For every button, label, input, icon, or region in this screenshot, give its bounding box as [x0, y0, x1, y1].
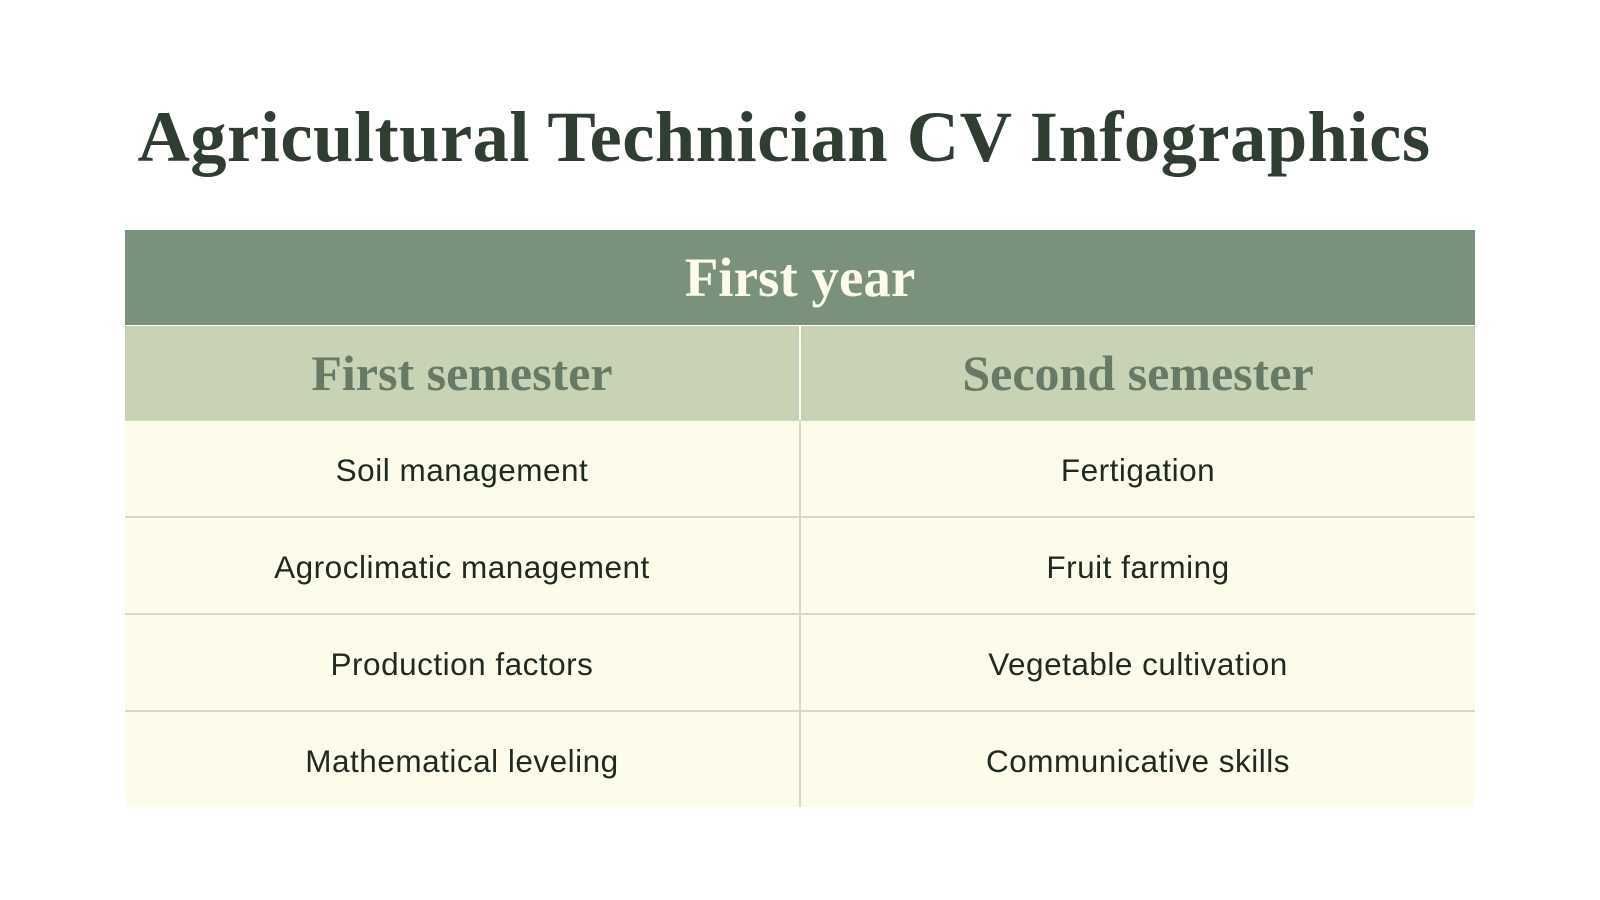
subheader: first semester	[125, 326, 799, 420]
title: Agricultural Technician CV Infographics	[137, 96, 1431, 177]
header: First year	[125, 230, 1475, 325]
row 3 right	[801, 615, 1475, 710]
row 2 left: Agroclimatic management	[274, 548, 650, 584]
subheader: second semester: Second semester	[962, 345, 1314, 401]
row 1 left: Soil management	[336, 452, 588, 488]
row 3 left: Production factors	[331, 646, 593, 682]
table	[125, 230, 1475, 807]
row 2 left	[125, 518, 799, 613]
row 3 right: Vegetable cultivation	[988, 646, 1288, 682]
row 2 right: Fruit farming	[1046, 548, 1230, 584]
row 4 left: Mathematical leveling	[305, 742, 619, 778]
row 2 right	[801, 518, 1475, 613]
row 4 right	[801, 712, 1475, 807]
row 1 right	[801, 421, 1475, 516]
subheader: second semester	[801, 326, 1475, 420]
subheader: first semester: First semester	[311, 345, 613, 401]
row 4 right: Communicative skills	[986, 742, 1290, 778]
row 1 right: Fertigation	[1061, 452, 1215, 488]
row 3 left	[125, 615, 799, 710]
row 4 left	[125, 712, 799, 807]
header: First year: First year	[685, 247, 915, 308]
row 1 left	[125, 421, 799, 516]
